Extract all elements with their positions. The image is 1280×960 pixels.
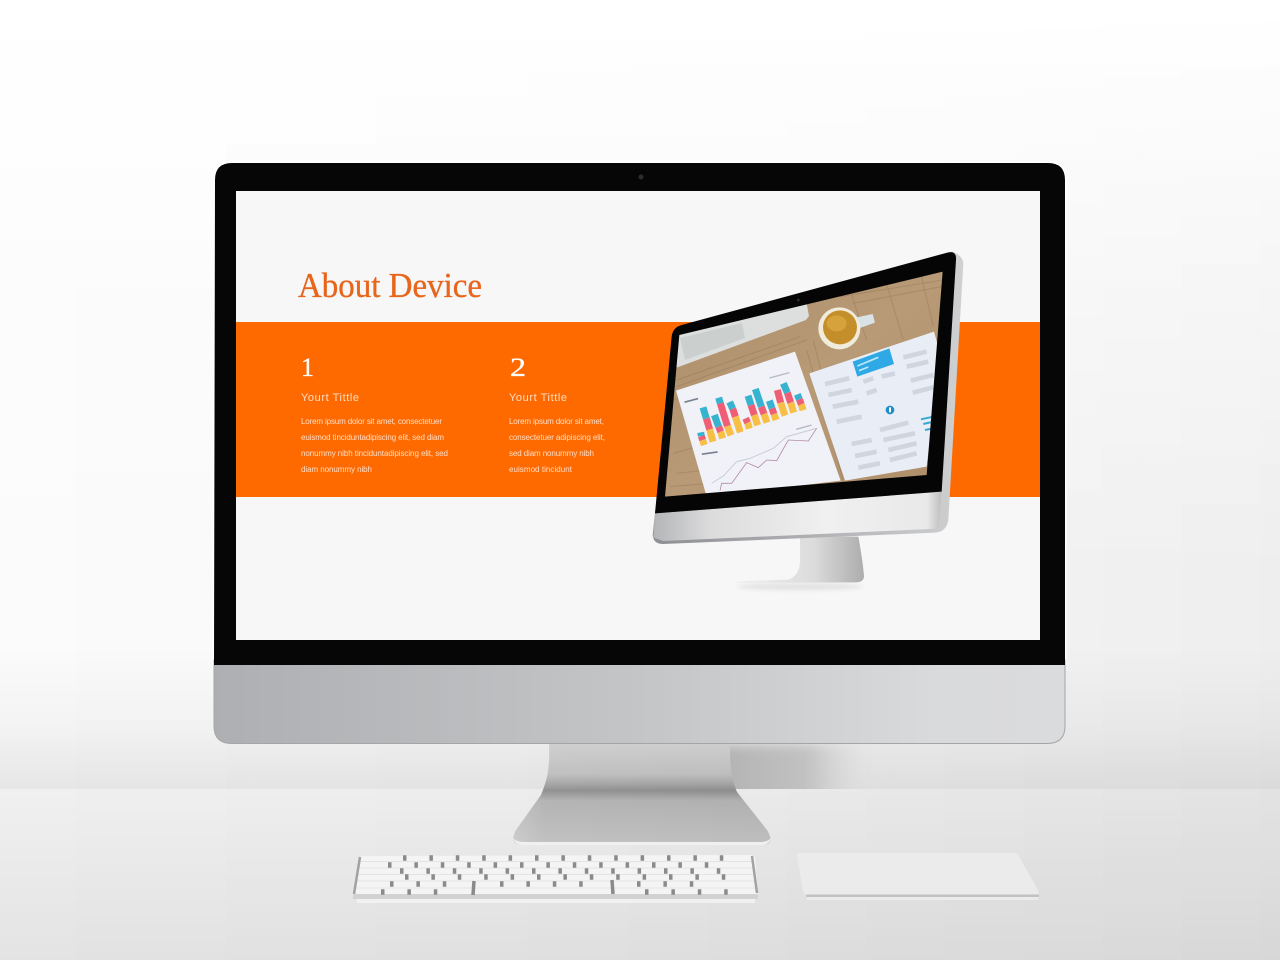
number 2: 2	[510, 353, 526, 382]
blue segments	[701, 383, 799, 436]
spacebar dividers	[473, 880, 613, 895]
slide background	[236, 191, 1040, 640]
chart headings	[684, 372, 812, 455]
slide title: About Device	[298, 266, 482, 305]
webcam	[638, 174, 644, 180]
small monitor shadow	[737, 583, 863, 590]
wood planks	[670, 270, 943, 487]
trackpad reflection	[807, 897, 1038, 900]
laptop trackpad	[680, 323, 745, 360]
bar chart	[701, 383, 803, 445]
small monitor illustration	[653, 252, 963, 590]
cup handle	[857, 314, 875, 328]
coffee	[823, 310, 857, 344]
monitor black bezel	[214, 163, 1065, 665]
grey series	[712, 428, 817, 483]
keyboard bottom edge	[353, 894, 758, 899]
body text 1	[301, 417, 448, 474]
keyboard row gaps	[355, 862, 756, 888]
key rows	[381, 858, 736, 892]
large monitor	[214, 163, 1065, 744]
page	[676, 352, 841, 497]
laptop	[673, 300, 809, 368]
stand horizontal shading	[513, 744, 770, 845]
wall shadow right of stand	[730, 744, 848, 789]
page text lines	[825, 352, 933, 468]
yellow segments	[703, 403, 803, 445]
number 1: 1	[301, 353, 314, 382]
body text 1: euismod tinciduntadipiscing elit, sed diam	[301, 433, 444, 442]
coffee cup	[818, 307, 875, 349]
small monitor screen photo	[665, 272, 943, 497]
body text 2: sed diam nonummy nibh	[509, 449, 594, 458]
monitor stand	[513, 744, 771, 845]
body text 2: consectetuer adipiscing elit,	[509, 433, 605, 442]
page	[809, 332, 940, 481]
stand body	[513, 744, 770, 845]
slide screen	[236, 191, 1040, 640]
trackpad	[797, 853, 1039, 900]
keyboard frame shading	[354, 856, 757, 894]
blue info icon	[886, 406, 894, 414]
header box text	[857, 357, 878, 371]
heading 2: Yourt Tittle	[509, 392, 567, 404]
red segments	[701, 390, 801, 440]
stand base highlight	[513, 838, 771, 845]
body text 1: diam nonummy nibh	[301, 465, 372, 474]
orange band	[236, 322, 1040, 497]
small monitor chin	[653, 492, 942, 541]
blue side bars	[921, 417, 933, 430]
keyboard body	[353, 855, 758, 899]
column 1	[301, 353, 448, 474]
keyboard shadow	[357, 898, 755, 903]
trackpad top	[797, 853, 1039, 895]
line chart	[712, 428, 817, 491]
keyboard	[353, 855, 758, 903]
background: desk	[0, 789, 1280, 960]
body text 1: Lorem ipsum dolor sit amet, consectetuer	[301, 417, 442, 426]
pink series	[720, 428, 817, 491]
body text 2: euismod tincidunt	[509, 465, 573, 474]
small monitor stand	[737, 537, 864, 583]
wood desk	[665, 272, 943, 497]
coffee highlight	[827, 315, 847, 331]
trackpad edge	[806, 894, 1039, 897]
body text 1: nonummy nibh tinciduntadipiscing elit, sed	[301, 449, 448, 458]
monitor white halo	[214, 163, 1065, 665]
resume page	[809, 332, 940, 481]
background: right side shading	[945, 375, 1280, 960]
small monitor webcam	[797, 299, 800, 301]
small monitor bezel	[655, 252, 956, 513]
blue header box	[853, 348, 894, 377]
cup rim	[818, 307, 860, 349]
body text 2	[509, 417, 605, 474]
info icon mark	[889, 407, 891, 412]
monitor chin	[214, 660, 1065, 744]
body text 2: Lorem ipsum dolor sit amet,	[509, 417, 604, 426]
heading 1: Yourt Tittle	[301, 392, 359, 404]
report page	[676, 352, 841, 497]
small monitor silver side	[653, 252, 963, 544]
column 2	[509, 353, 605, 474]
